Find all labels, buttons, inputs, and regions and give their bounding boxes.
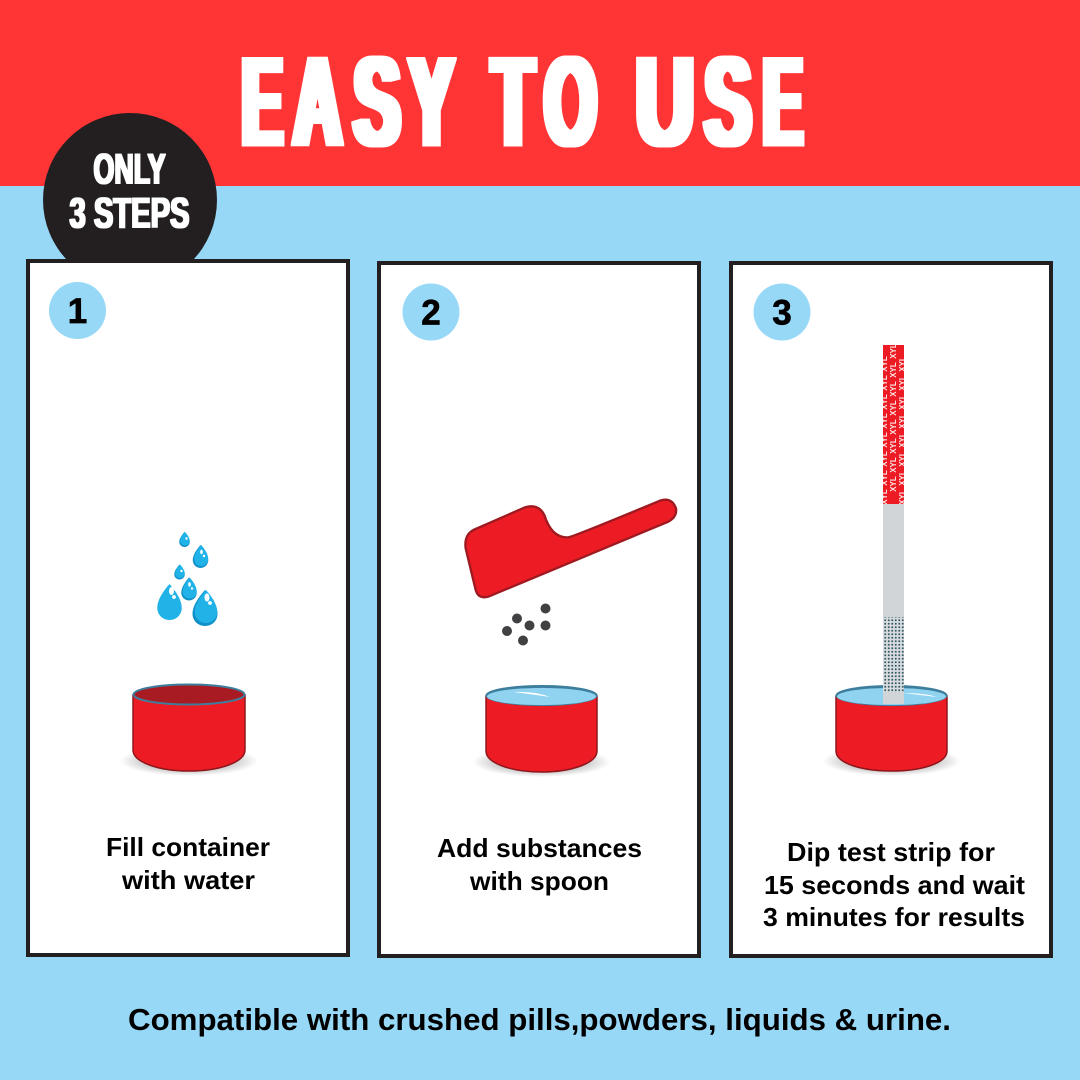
- title: [242, 32, 802, 174]
- strip labels: [883, 345, 904, 504]
- caption step 3: [763, 837, 1025, 932]
- strip labels: XYL: [898, 432, 907, 448]
- icon: test strip: [883, 345, 904, 704]
- strip labels: XYL: [898, 470, 907, 486]
- strip labels: XYL: [889, 438, 898, 454]
- strip labels: XYL: [889, 476, 898, 492]
- strip labels: XYL: [880, 413, 889, 429]
- strip labels: XYL: [898, 394, 907, 410]
- strip labels: XYL: [880, 451, 889, 467]
- badge: only 3 steps: [43, 113, 217, 287]
- panel: step 1: [28, 261, 348, 955]
- caption step 2: [437, 833, 642, 896]
- strip labels: XYL: [880, 394, 889, 410]
- caption step 1: [106, 832, 270, 895]
- strip labels: XYL: [889, 400, 898, 416]
- title: O: [544, 32, 596, 174]
- footer note: Compatible with crushed pills,powders, liquids & urine.: [128, 1002, 951, 1037]
- step number 3: 3: [772, 294, 792, 332]
- strip labels: XYL: [889, 362, 898, 378]
- title: E: [242, 32, 282, 174]
- caption step 3: Dip test strip for: [787, 837, 995, 867]
- strip labels: XYL: [889, 457, 898, 473]
- strip labels: XYL: [889, 343, 898, 359]
- panel: step 3: [731, 263, 1051, 956]
- strip labels: XYL: [880, 356, 889, 372]
- badge: only 3 steps: 3 STEPS: [70, 191, 190, 238]
- strip labels: XYL: [880, 489, 889, 505]
- step number 1: 1: [68, 292, 87, 331]
- title: U: [636, 32, 694, 174]
- strip labels: XYL: [889, 381, 898, 397]
- icon: powder particles: [502, 604, 550, 646]
- caption step 2: Add substances: [437, 833, 642, 863]
- step number 2: 2: [421, 294, 441, 332]
- caption step 1: Fill container: [106, 832, 270, 862]
- strip labels: XYL: [898, 375, 907, 391]
- header band: [0, 0, 1080, 186]
- panel: step 2: [379, 263, 699, 956]
- strip labels: XYL: [898, 451, 907, 467]
- badge: only 3 steps: ONLY: [94, 147, 166, 194]
- strip labels: XYL: [898, 413, 907, 429]
- text: E: [763, 32, 802, 174]
- title: Y: [410, 32, 454, 174]
- strip labels: XYL: [889, 419, 898, 435]
- icon: empty container: [120, 684, 258, 776]
- caption step 2: with spoon: [469, 866, 609, 896]
- caption step 1: with water: [121, 865, 255, 895]
- title: S: [354, 32, 400, 174]
- strip labels: XYL: [880, 432, 889, 448]
- icon: container for strip: [822, 686, 960, 776]
- caption step 3: 3 minutes for results: [763, 902, 1025, 932]
- step number 1: [49, 282, 106, 339]
- icon: water drops: [157, 532, 218, 626]
- title: T: [492, 32, 534, 174]
- strip labels: XYL: [898, 356, 907, 372]
- step number 3: [754, 284, 810, 340]
- icon: spoon: [465, 500, 676, 597]
- strip labels: XYL: [880, 375, 889, 391]
- title: S: [705, 32, 751, 174]
- icon: container with water: [472, 686, 610, 777]
- caption step 3: 15 seconds and wait: [764, 870, 1025, 900]
- strip labels: XYL: [898, 489, 907, 505]
- step number 2: [402, 284, 460, 340]
- strip labels: XYL: [880, 470, 889, 486]
- title: A: [294, 32, 342, 174]
